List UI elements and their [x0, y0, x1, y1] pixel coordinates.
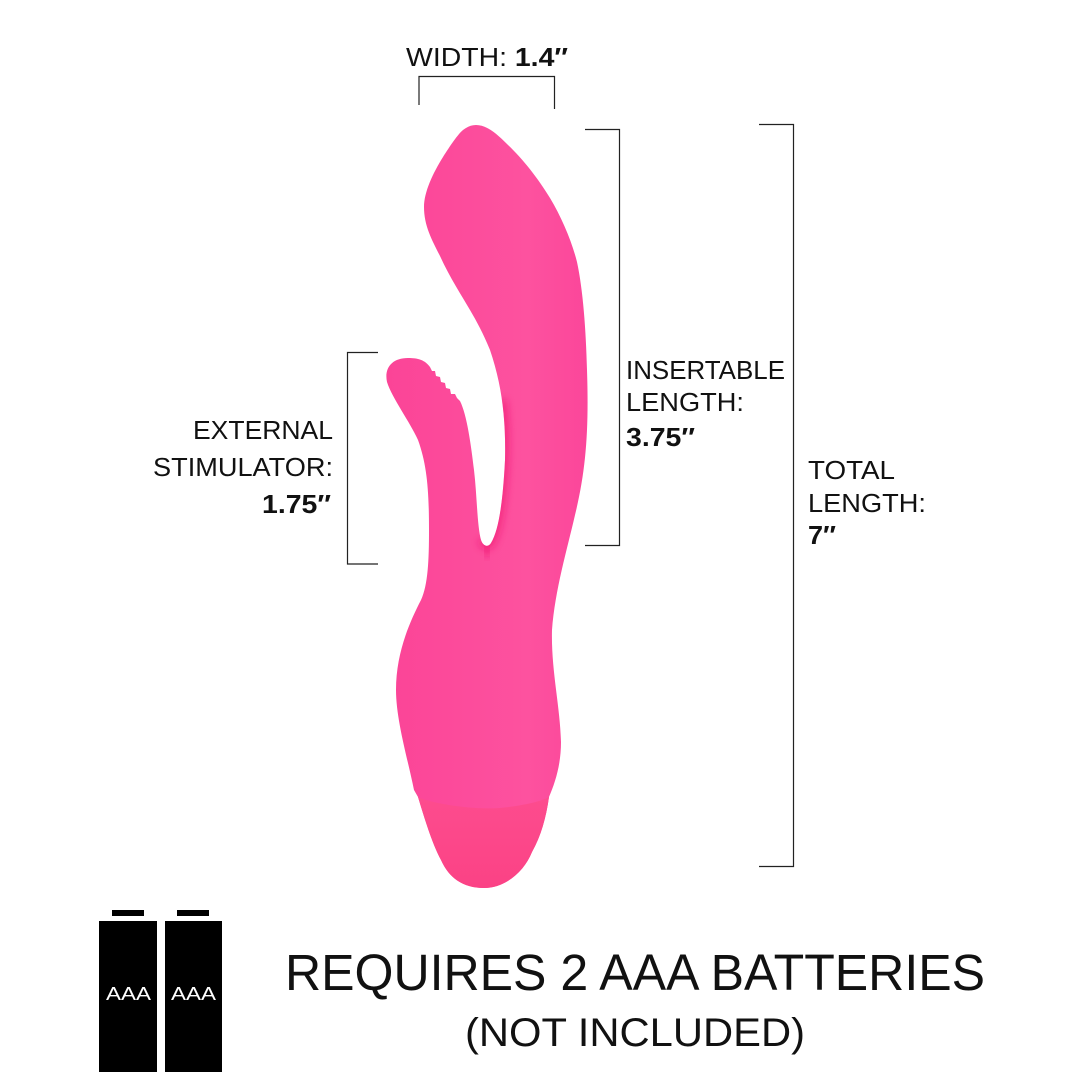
icon: AAA battery left: AAA — [106, 984, 151, 1004]
insertable length label: 3.75″ — [626, 424, 695, 452]
product silhouette — [386, 125, 588, 888]
base cap — [418, 797, 549, 888]
insertable length label: INSERTABLE — [626, 357, 785, 385]
width bracket — [419, 76, 554, 109]
icon: AAA battery right: AAA — [171, 984, 216, 1004]
external stimulator bracket — [348, 352, 378, 564]
icon: AAA battery right — [165, 910, 222, 1072]
total length label: 7″ — [808, 522, 836, 550]
total length label: TOTAL — [808, 457, 895, 485]
total length label: LENGTH: — [808, 490, 926, 518]
external stimulator label: STIMULATOR: — [153, 454, 333, 482]
battery requirement heading: REQUIRES 2 AAA BATTERIES — [285, 944, 985, 1001]
insertable length label: LENGTH: — [626, 389, 744, 417]
external stimulator label — [153, 417, 333, 519]
dimension diagram — [99, 48, 983, 1072]
external stimulator label: 1.75″ — [262, 491, 331, 519]
external stimulator label: EXTERNAL — [193, 417, 333, 445]
not included note: (NOT INCLUDED) — [465, 1011, 805, 1055]
total length bracket — [759, 124, 794, 866]
icon: AAA battery left — [99, 910, 157, 1072]
width label: WIDTH: 1.4″ — [406, 44, 568, 72]
total length label — [808, 457, 926, 550]
insertable length bracket — [585, 130, 620, 546]
crease shading — [481, 400, 505, 556]
insertable length label — [626, 357, 785, 452]
